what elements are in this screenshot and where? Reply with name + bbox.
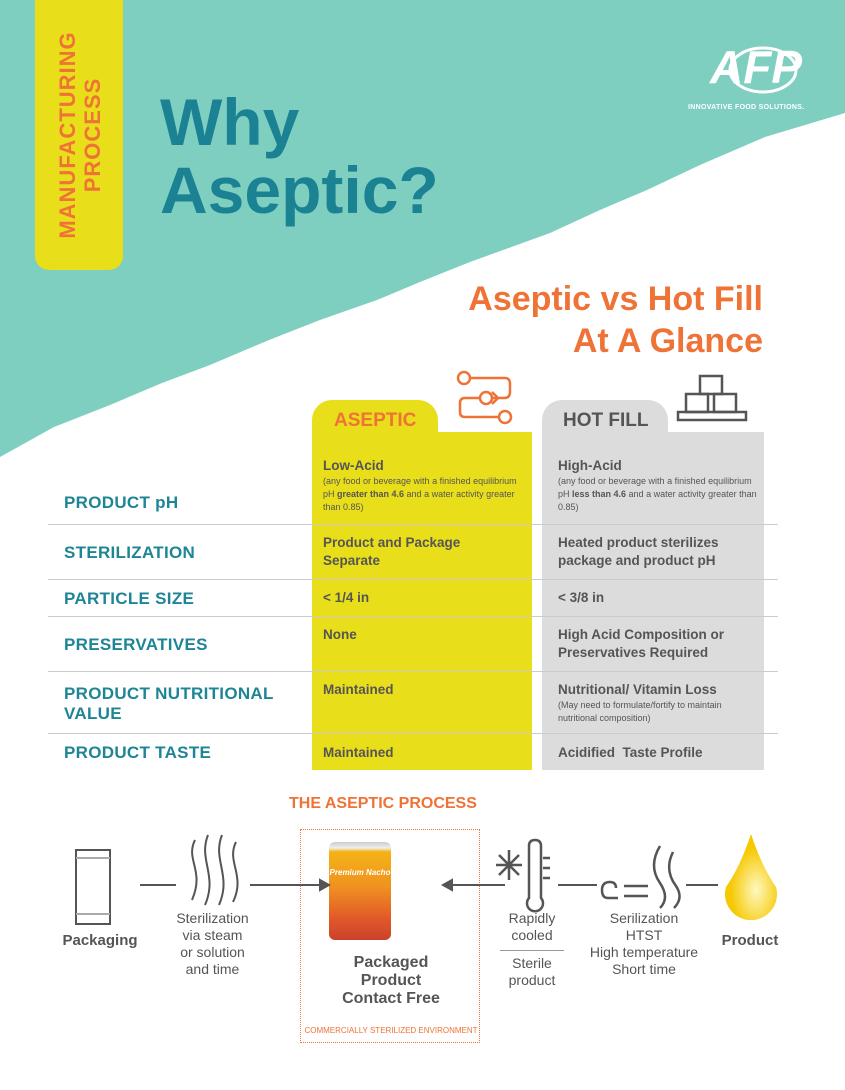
- text: None: [323, 627, 357, 642]
- subtitle: Aseptic vs Hot Fill: [468, 280, 763, 318]
- text: via steam: [183, 927, 242, 943]
- dotted box: [300, 829, 480, 1043]
- icon: jars: [676, 374, 748, 422]
- aseptic column: [312, 400, 438, 440]
- text: Product and Package: [323, 535, 460, 550]
- dotted box: COMMERCIALLY STERILIZED ENVIRONMENT: [304, 1026, 478, 1035]
- title: Why: [160, 85, 299, 159]
- icon: process: [456, 370, 512, 424]
- title: [160, 85, 439, 227]
- dotted box: Contact Free: [342, 990, 440, 1007]
- title: Aseptic?: [160, 153, 439, 227]
- text: Preservatives Required: [558, 645, 708, 660]
- text: Packaging: [62, 932, 138, 949]
- text: Sterilization: [176, 910, 249, 926]
- text: Product: [722, 932, 778, 949]
- text: High-Acid: [558, 458, 622, 473]
- row: nutritional value: [64, 684, 274, 723]
- text: (any food or beverage with a finished equilibrium pH greater than 4.6 and a water activity greater than 0.85): [323, 476, 517, 512]
- text: or solution: [180, 944, 245, 960]
- dotted box: Product: [361, 972, 421, 989]
- text: Maintained: [323, 682, 394, 697]
- connectors: [140, 878, 718, 892]
- icon: packaging: [75, 849, 111, 925]
- row: product pH: PRODUCT pH: [64, 493, 178, 512]
- text: Separate: [323, 553, 380, 568]
- logo: [688, 41, 804, 111]
- hot fill column: [542, 400, 668, 440]
- row: taste: PRODUCT TASTE: [64, 743, 211, 762]
- text: Low-Acid: [323, 458, 384, 473]
- text: High Acid Composition or: [558, 627, 724, 642]
- row: sterilization: STERILIZATION: [64, 543, 195, 562]
- icon: heat: [600, 845, 681, 909]
- icon: product drop: [725, 834, 777, 920]
- text: High temperature: [590, 944, 698, 960]
- row: nutritional value: PRODUCT NUTRITIONAL: [64, 684, 274, 703]
- text: (May need to formulate/fortify to maintain nutritional composition): [558, 700, 722, 723]
- text: cooled: [511, 927, 553, 943]
- row: preservatives: PRESERVATIVES: [64, 635, 208, 654]
- dotted box: Packaged: [354, 954, 428, 971]
- text: Heated product sterilizes: [558, 535, 719, 550]
- teal background: [0, 0, 845, 457]
- text: Rapidly: [509, 910, 555, 926]
- text: Serilization: [610, 910, 678, 926]
- text: Acidified Taste Profile: [558, 745, 703, 760]
- process heading: THE ASEPTIC PROCESS: [289, 795, 477, 812]
- logo: AFP: [710, 41, 802, 93]
- row: particle size: PARTICLE SIZE: [64, 589, 194, 608]
- text: HTST: [626, 927, 662, 943]
- can: [329, 842, 391, 940]
- text: Nutritional/ Vitamin Loss: [558, 682, 717, 697]
- text: < 1/4 in: [323, 590, 369, 605]
- text: Sterile: [512, 955, 552, 971]
- row dividers: [48, 524, 778, 525]
- text: (any food or beverage with a finished equilibrium pH less than 4.6 and a water activity greater than 0.85): [558, 476, 757, 512]
- text: product: [509, 972, 555, 988]
- text: Short time: [612, 961, 676, 977]
- icon: snowflake thermometer: [496, 838, 550, 912]
- yellow tab: manufacturing process: PROCESS: [80, 78, 105, 192]
- text: Maintained: [323, 745, 394, 760]
- yellow tab: manufacturing process: MANUFACTURING: [55, 31, 80, 239]
- subtitle: At A Glance: [573, 322, 763, 360]
- text: and time: [186, 961, 239, 977]
- row: nutritional value: VALUE: [64, 704, 122, 723]
- icon: steam: [191, 834, 239, 906]
- yellow tab: manufacturing process: [35, 0, 123, 270]
- text: < 3/8 in: [558, 590, 604, 605]
- text: package and product pH: [558, 553, 716, 568]
- text: HOT FILL: [563, 410, 648, 431]
- can: Premium Nacho: [330, 868, 390, 877]
- subtitle: [468, 280, 763, 360]
- logo: INNOVATIVE FOOD SOLUTIONS.: [688, 104, 804, 111]
- text: ASEPTIC: [334, 410, 416, 431]
